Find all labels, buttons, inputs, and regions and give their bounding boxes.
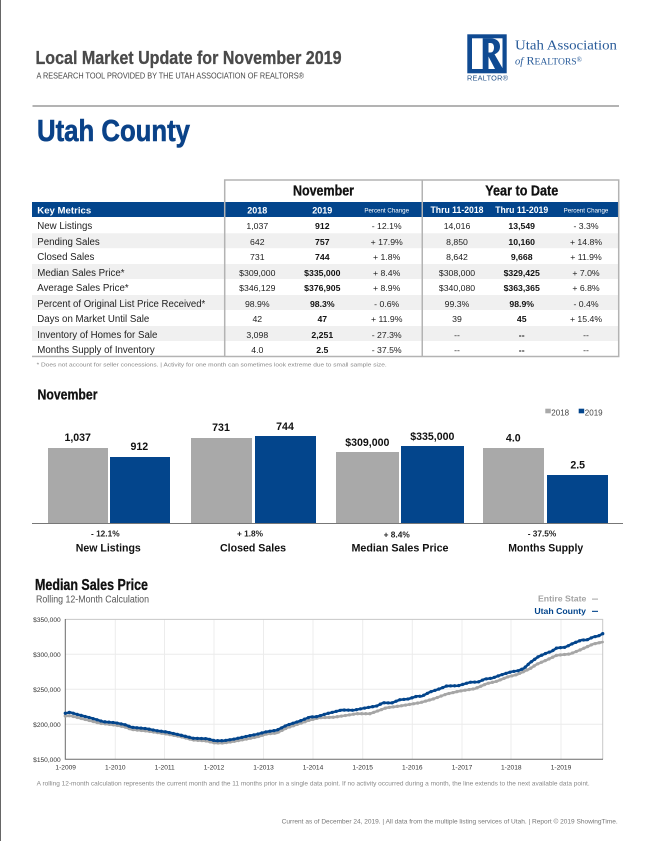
row: New Listings: - 12.1% — [372, 221, 402, 231]
legend: series names: Entire State — [538, 594, 586, 604]
logo wordmark line 2: of — [515, 56, 525, 68]
row: Days on Market Until Sale: 39 — [452, 314, 462, 324]
row: Percent of Original List Price Received: 99.3% — [445, 299, 470, 309]
x axis labels: 1-2018 — [501, 764, 522, 771]
row: Percent of Original List Price Received: - 0.6% — [374, 299, 400, 309]
row: Inventory of Homes for Sale: 2,251 — [311, 330, 333, 340]
legend: series names — [534, 594, 598, 616]
bar group: Median Sales Price: $309,000 — [345, 437, 389, 449]
row: Closed Sales: 744 — [315, 252, 330, 262]
bar group: Closed Sales: 744 — [276, 421, 294, 433]
row: Median Sales Price: + 8.4% — [373, 268, 401, 278]
bar group: Months Supply: 4.0 — [506, 433, 521, 445]
table header row: Thru 11-2019 — [495, 205, 548, 215]
chart gridlines and axes — [65, 619, 603, 759]
bar group: Months Supply: - 37.5% — [528, 529, 557, 539]
row: Median Sales Price: $335,000 — [304, 268, 341, 278]
row: Percent of Original List Price Received: 98.9% — [245, 299, 270, 309]
x axis labels: 1-2009 — [55, 764, 76, 771]
x axis labels: 1-2014 — [303, 764, 324, 771]
row: Months Supply of Inventory: Months Supply of Inventory — [37, 345, 155, 356]
bar group: Months Supply — [483, 433, 608, 555]
row: Closed Sales: 731 — [250, 252, 265, 262]
table header row: 2018 — [247, 205, 267, 215]
bar group: New Listings: New Listings — [76, 543, 141, 555]
y axis labels — [33, 617, 61, 764]
x axis labels: 1-2013 — [253, 764, 274, 771]
bar group: Months Supply: Months Supply — [508, 543, 583, 555]
x axis labels: 1-2011 — [155, 764, 175, 771]
row: Inventory of Homes for Sale: 3,098 — [246, 330, 268, 340]
row: Days on Market Until Sale: 42 — [252, 314, 262, 324]
row: Months Supply of Inventory: - 37.5% — [372, 345, 402, 355]
y axis labels: $350,000 — [33, 617, 61, 624]
bar group: New Listings: 1,037 — [64, 432, 91, 444]
row: Pending Sales: Pending Sales — [37, 237, 100, 248]
row: New Listings: 912 — [315, 221, 330, 231]
row: Percent of Original List Price Received: 98.9% — [509, 299, 534, 309]
row: Percent of Original List Price Received — [37, 299, 599, 310]
row: Pending Sales — [37, 237, 602, 248]
page footer: Current as of December 24, 2019. | All data from the multiple listing services of Utah. | Report © 2019 ShowingTime. — [282, 818, 618, 825]
row: Inventory of Homes for Sale — [37, 330, 589, 341]
row: Percent of Original List Price Received: - 0.4% — [573, 299, 599, 309]
row: New Listings: 14,016 — [444, 221, 470, 231]
bar group: Median Sales Price — [336, 431, 464, 555]
row: New Listings: - 3.3% — [573, 221, 599, 231]
logo wordmark line 2: ® — [577, 56, 583, 64]
row: Median Sales Price: + 7.0% — [572, 268, 600, 278]
row: Median Sales Price: $309,000 — [239, 268, 276, 278]
row: New Listings — [37, 221, 599, 232]
row: Closed Sales: 8,642 — [446, 252, 468, 262]
row: Closed Sales: + 11.9% — [570, 252, 602, 262]
x axis labels: 1-2016 — [402, 764, 423, 771]
table footnote: * Does not account for seller concessions. | Activity for one month can sometimes look extreme due to small sample size. — [37, 363, 387, 369]
row: Median Sales Price: Median Sales Price* — [37, 268, 125, 279]
row: Months Supply of Inventory: 2.5 — [316, 345, 329, 355]
x axis labels — [55, 764, 572, 771]
bar group: New Listings: 912 — [130, 441, 148, 453]
chart footnote: A rolling 12-month calculation represents the current month and the 11 months prior in a single data point. If no activity occurred during a month, the line extends to the next available data point. — [37, 782, 590, 788]
row: Days on Market Until Sale — [37, 314, 602, 325]
table header row: Percent Change — [364, 208, 410, 214]
panel: key metrics table — [32, 180, 619, 357]
row: Inventory of Homes for Sale: -- — [454, 330, 460, 340]
row: Average Sales Price: $340,080 — [439, 283, 475, 293]
report title: Local Market Update for November 2019 — [36, 47, 342, 68]
table header row: Percent Change — [564, 208, 609, 214]
y axis labels: $150,000 — [33, 757, 61, 764]
y axis labels: $300,000 — [33, 652, 61, 659]
row: Days on Market Until Sale: 45 — [517, 314, 527, 324]
line: Entire State — [65, 642, 603, 743]
bar group: Closed Sales: + 1.8% — [237, 529, 264, 539]
x axis labels: 1-2012 — [204, 764, 225, 771]
table header row: 2019 — [312, 205, 332, 215]
legend: series names: Utah County — [534, 606, 586, 616]
table header row: Thru 11-2018 — [430, 205, 484, 215]
bar group: Closed Sales: Closed Sales — [220, 543, 286, 555]
row: Average Sales Price: $346,129 — [239, 283, 276, 293]
panel: November bar charts — [32, 386, 623, 555]
row: Days on Market Until Sale: Days on Market Until Sale — [37, 314, 149, 325]
logo wordmark line 2: R — [526, 54, 535, 68]
row: Closed Sales: 9,668 — [511, 252, 533, 262]
row: Days on Market Until Sale: + 15.4% — [570, 314, 602, 324]
x axis labels: 1-2010 — [105, 764, 126, 771]
bar group: New Listings: - 12.1% — [91, 529, 120, 539]
y axis labels: $200,000 — [33, 722, 61, 729]
row: Pending Sales: 8,850 — [446, 237, 468, 247]
legend: 2018 and 2019 — [545, 408, 603, 418]
row: Percent of Original List Price Received: Percent of Original List Price Received* — [37, 299, 206, 310]
bar group: Median Sales Price: $335,000 — [410, 431, 454, 443]
row: Closed Sales: + 1.8% — [373, 252, 401, 262]
row: Pending Sales: + 17.9% — [371, 237, 403, 247]
row: Average Sales Price: + 8.9% — [373, 283, 401, 293]
county heading: Utah County — [37, 113, 191, 148]
row: Inventory of Homes for Sale: - 27.3% — [372, 330, 402, 340]
logo wordmark line 2: EALTORS — [535, 56, 577, 68]
row: New Listings: 1,037 — [246, 221, 268, 231]
line: Utah County — [65, 634, 603, 741]
row: Median Sales Price — [37, 268, 600, 279]
row: Percent of Original List Price Received: 98.3% — [310, 299, 335, 309]
bar group: Closed Sales: 731 — [212, 422, 230, 434]
row: Inventory of Homes for Sale: -- — [583, 330, 589, 340]
row: Days on Market Until Sale: + 11.9% — [371, 314, 403, 324]
bar group: Median Sales Price: Median Sales Price — [352, 543, 449, 555]
subheading: rolling calculation: Rolling 12-Month Calculation — [36, 595, 149, 606]
row: Pending Sales: + 14.8% — [570, 237, 602, 247]
table header row — [37, 205, 609, 216]
icon: realtor R block — [467, 34, 507, 73]
table header row: Key Metrics — [37, 205, 91, 216]
bar group: Closed Sales — [191, 421, 316, 555]
legend: 2018 and 2019: 2019 — [585, 408, 603, 418]
report subtitle: A RESEARCH TOOL PROVIDED BY THE UTAH ASSOCIATION OF REALTORS® — [36, 70, 305, 80]
row: Closed Sales — [37, 252, 602, 263]
row: Average Sales Price — [37, 283, 600, 294]
x axis labels: 1-2015 — [352, 764, 373, 771]
row: Inventory of Homes for Sale: Inventory of Homes for Sale — [37, 330, 157, 341]
row: Months Supply of Inventory: -- — [519, 345, 525, 355]
row: New Listings: New Listings — [37, 221, 92, 232]
row: Inventory of Homes for Sale: -- — [519, 330, 525, 340]
row: Median Sales Price: $329,425 — [504, 268, 540, 278]
logo caption: REALTOR® — [467, 73, 509, 82]
row: New Listings: 13,549 — [508, 221, 535, 231]
row: Months Supply of Inventory — [37, 345, 589, 356]
column group heading: Year to Date: Year to Date — [485, 184, 558, 200]
bar group: New Listings — [48, 432, 170, 555]
row: Months Supply of Inventory: -- — [583, 345, 589, 355]
row: Median Sales Price: $308,000 — [439, 268, 475, 278]
row: Pending Sales: 642 — [250, 237, 265, 247]
bar group: Months Supply: 2.5 — [570, 460, 585, 472]
heading: Median Sales Price: Median Sales Price — [35, 577, 148, 594]
bar group: Median Sales Price: + 8.4% — [384, 530, 410, 540]
row: Average Sales Price: Average Sales Price* — [37, 283, 129, 294]
x axis labels: 1-2017 — [452, 764, 473, 771]
row: Average Sales Price: $376,905 — [304, 283, 341, 293]
logo wordmark line 1: Utah Association — [515, 38, 617, 52]
row: Closed Sales: Closed Sales — [37, 252, 95, 263]
row: Pending Sales: 10,160 — [508, 237, 535, 247]
row: Pending Sales: 757 — [315, 237, 330, 247]
heading: November: November — [38, 386, 98, 403]
logo: Utah Association of Realtors — [467, 34, 617, 82]
column group heading: November: November — [293, 184, 354, 200]
row: Average Sales Price: $363,365 — [504, 283, 540, 293]
y axis labels: $250,000 — [33, 687, 61, 694]
panel: median sales price line chart — [33, 577, 603, 771]
row: Months Supply of Inventory: 4.0 — [251, 345, 264, 355]
legend: 2018 and 2019: 2018 — [551, 408, 570, 418]
x axis labels: 1-2019 — [551, 764, 572, 771]
row: Months Supply of Inventory: -- — [454, 345, 460, 355]
row: Average Sales Price: + 6.8% — [572, 283, 600, 293]
row: Days on Market Until Sale: 47 — [317, 314, 327, 324]
